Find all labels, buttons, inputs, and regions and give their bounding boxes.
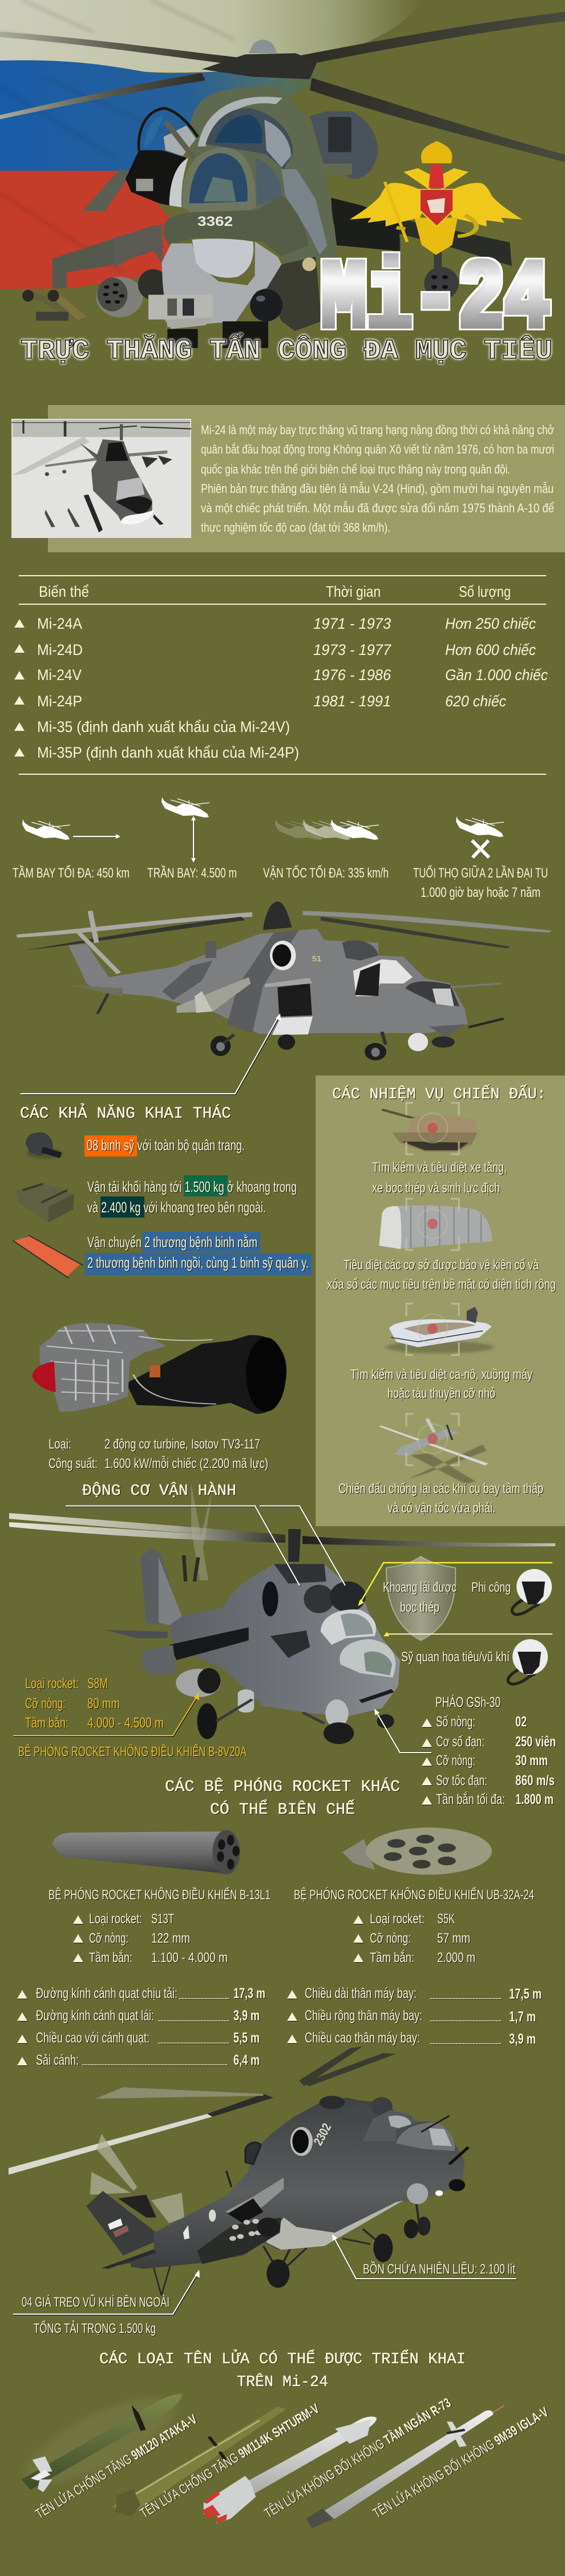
item: casualties: Vận chuyển 2 thương bệnh binh nằm — [87, 1234, 257, 1251]
specs: rotor and size (left) — [17, 1985, 265, 2068]
missile: 9M39 Igla-V — [306, 2405, 505, 2529]
heading: missiles — [99, 2348, 466, 2391]
icon: drone — [378, 1414, 489, 1483]
icon: helmet with night vision — [26, 1133, 63, 1159]
right wing root — [331, 198, 399, 251]
upper canopy — [198, 97, 293, 169]
gun specs: GSh-30: Cơ số đạn: — [436, 1734, 485, 1750]
gun specs: GSh-30: 02 — [515, 1714, 527, 1730]
specs: B-13L1: BỆ PHÓNG ROCKET KHÔNG ĐIỀU KHIỂN B-13L1 — [49, 1887, 271, 1903]
gun specs: GSh-30 — [422, 1694, 556, 1807]
table rows: 620 chiếc — [445, 693, 506, 710]
engine specs: Công suất: — [49, 1456, 98, 1471]
flag: Russian tricolour — [0, 0, 422, 289]
callout: fuel tank — [332, 2234, 516, 2279]
specs: B-13L1: Loại rocket: — [89, 1911, 142, 1927]
specs: rotor and size (left): 3,9 m — [233, 2008, 260, 2024]
lower nose grey — [162, 241, 284, 327]
table: variants — [14, 575, 548, 775]
helicopter front view — [114, 84, 399, 348]
fuselage — [104, 1529, 400, 1744]
engine intake — [310, 111, 378, 179]
specs: rotor and size (left): 17,3 m — [233, 1985, 265, 2001]
table rows: Mi-24P — [37, 693, 82, 710]
callout: engine arrows — [66, 1506, 345, 1586]
specs: UB-32A-24: Tầm bắn: — [370, 1950, 414, 1966]
tail fin — [86, 2191, 156, 2255]
stabilizer — [102, 2250, 156, 2269]
nose gear — [167, 321, 268, 348]
heading: transport capabilities: CÁC KHẢ NĂNG KHAI THÁC — [20, 1103, 231, 1123]
callout: external hardpoints: TỔNG TẢI TRỌNG 1.500 kg — [34, 2320, 156, 2336]
stub wing — [225, 2178, 284, 2223]
table rows: Mi-35 (định danh xuất khẩu của Mi-24V) — [37, 718, 290, 735]
rocket pod specs: B-8V20A: BỆ PHÓNG ROCKET KHÔNG ĐIỀU KHIỂN B-8V20A — [18, 1744, 247, 1760]
specs: B-13L1: S13T — [151, 1911, 174, 1927]
helicopter side view: 51 — [312, 954, 322, 963]
rotor hub — [202, 39, 317, 79]
engine specs: 2 động cơ turbine, Isotov TV3-117 — [104, 1437, 260, 1452]
icon: tank — [382, 1103, 478, 1154]
gunner canopies — [363, 2110, 455, 2151]
panel: introduction — [11, 405, 565, 552]
main rotor blades — [0, 12, 565, 162]
callout: weapons officer — [384, 1632, 552, 1684]
specs: rotor and size (left): Sải cánh: — [36, 2052, 79, 2068]
rocket pod specs: B-8V20A: S8M — [87, 1676, 108, 1692]
attack helicopter banking view — [9, 2047, 469, 2295]
specs: B-13L1: 1.100 - 4.000 m — [151, 1950, 228, 1966]
callout: pilot: Phi công — [471, 1580, 511, 1595]
table rows: 1973 - 1977 — [313, 641, 392, 658]
rotor blades — [9, 2047, 396, 2175]
stat: ceiling: TRẦN BAY: 4.500 m — [147, 865, 237, 881]
callout: B-8V20A pod — [13, 1692, 199, 1736]
table rows — [14, 615, 548, 761]
specs: rotor and size (left): 6,4 m — [233, 2052, 260, 2068]
missile label: R-73: TÊN LỬA KHÔNG ĐỐI KHÔNG TẦM NGẮN R-73 — [261, 2394, 454, 2521]
side number: 2302 — [310, 2121, 334, 2148]
side marking — [183, 2210, 216, 2239]
rocket pod illustration: UB-32A-24 — [342, 1827, 492, 1875]
heading: other rocket pods — [165, 1777, 400, 1819]
item: soldiers — [84, 1135, 245, 1156]
specs: rotor and size (left): Chiều cao với cánh quạt: — [36, 2030, 150, 2046]
specs: B-13L1 — [49, 1887, 271, 1966]
heading: other rocket pods: CÁC BỆ PHÓNG ROCKET KHÁC — [165, 1777, 400, 1796]
landing light — [302, 257, 316, 271]
under-nose — [164, 318, 213, 329]
table header: Thời gian — [326, 583, 381, 600]
specs: fuselage size (right): 3,9 m — [509, 2031, 536, 2047]
rocket pod specs: B-8V20A: Tầm bắn: — [25, 1714, 68, 1731]
engine specs: Loại: — [49, 1437, 71, 1452]
rocket pod specs: B-8V20A: 4.000 - 4.500 m — [87, 1715, 164, 1731]
right lower body — [267, 257, 321, 331]
item: cargo: Vận tải khối hàng tới 1.500 kg ở khoang trong — [87, 1178, 297, 1195]
specs: UB-32A-24: S5K — [437, 1911, 455, 1927]
heading: missiles: TRÊN Mi-24 — [237, 2373, 328, 2391]
engine illustration — [33, 1323, 286, 1414]
rocket pods — [197, 2218, 281, 2264]
missile label: Ataka-V: TÊN LỬA CHỐNG TĂNG 9M120 ATAKA-V — [33, 2411, 200, 2522]
specs: rotor and size (left): Đường kính cánh quạt lái: — [36, 2008, 154, 2024]
specs: UB-32A-24: 2.000 m — [437, 1950, 475, 1966]
icon: cargo crate — [15, 1183, 74, 1222]
panel: combat missions — [316, 1075, 565, 1526]
section: transport capabilities — [13, 1103, 312, 1278]
belly highlight — [266, 2201, 403, 2250]
specs: fuselage size (right): Chiều cao thân máy bay: — [305, 2030, 420, 2046]
table header — [39, 583, 511, 600]
specs: rotor and size (left): Đường kính cánh quạt chịu tải: — [36, 1985, 177, 2001]
icon: pilot helmet — [512, 1569, 552, 1615]
gun box — [148, 295, 213, 320]
intro text — [201, 423, 554, 535]
heading: engines: ĐỘNG CƠ VẬN HÀNH — [82, 1481, 236, 1500]
specs: B-13L1: Cỡ nòng: — [89, 1931, 128, 1946]
specs: rotor and size (left): 5,5 m — [233, 2030, 260, 2046]
table rows: 1976 - 1986 — [313, 666, 392, 684]
stat: overhaul life — [413, 816, 548, 900]
gun specs: GSh-30: Sơ tốc đạn: — [436, 1773, 487, 1789]
item: soldiers: 08 binh sỹ với toàn bộ quân trang. — [87, 1137, 245, 1154]
exhaust intake — [290, 2127, 313, 2156]
stat: max speed: VẬN TỐC TỐI ĐA: 335 km/h — [263, 865, 389, 881]
callout: armoured cockpit — [358, 1563, 552, 1615]
missile: 9M120 Ataka-V — [6, 2383, 195, 2497]
chin sensor — [192, 238, 253, 278]
gun specs: GSh-30: 30 mm — [515, 1753, 548, 1769]
subtitle: TRỰC THĂNG TẤN CÔNG ĐA MỤC TIÊU — [21, 334, 552, 367]
specs: UB-32A-24: Cỡ nòng: — [370, 1931, 411, 1946]
nose number: 3362 — [197, 214, 233, 229]
tail flag — [108, 2218, 129, 2238]
arrowhead: cabin door — [276, 1013, 281, 1021]
icon: hardened shelter — [379, 1199, 492, 1250]
specs: B-13L1: Tầm bắn: — [89, 1950, 132, 1966]
fuselage — [103, 2098, 465, 2269]
table rows: 1981 - 1991 — [313, 693, 391, 710]
callout: external hardpoints — [13, 2270, 200, 2336]
text: low-flying aircraft: và có vận tốc vừa phải. — [388, 1501, 495, 1516]
shield: armoured cockpit — [386, 1556, 455, 1640]
missile label: Shturm-V: TÊN LỬA CHỐNG TĂNG 9M114K SHTURM-V — [137, 2400, 322, 2521]
stub wings and rear parts — [53, 168, 512, 288]
table rows: Mi-24D — [37, 641, 83, 658]
table rows: Mi-35P (định danh xuất khẩu của Mi-24P) — [37, 744, 299, 761]
fuselage — [190, 84, 337, 264]
table header: Biến thể — [39, 583, 89, 600]
callout: external hardpoints: 04 GIÁ TREO VŨ KHÍ BÊN NGOÀI — [22, 2294, 170, 2310]
text: boats: hoặc tàu thuyền cỡ nhỏ — [388, 1386, 495, 1401]
gun specs: GSh-30: Cỡ nòng: — [436, 1753, 475, 1769]
rocket pod illustration: B-13L1 — [53, 1830, 240, 1874]
rocket pod specs: B-8V20A: 80 mm — [87, 1696, 120, 1712]
stat: ceiling — [147, 797, 237, 881]
text: shelters — [327, 1257, 556, 1292]
text: tanks: Tìm kiếm và tiêu diệt xe tăng, — [372, 1160, 507, 1175]
stat: max speed — [263, 819, 389, 881]
glass behind door — [164, 126, 196, 156]
grey fuselage band — [281, 169, 327, 255]
rocket pod specs: B-8V20A: Cỡ nòng: — [25, 1696, 66, 1712]
landing gear — [263, 2202, 430, 2288]
tail rotor — [90, 2134, 184, 2223]
text: boats — [350, 1367, 532, 1401]
specs: B-13L1: 122 mm — [151, 1931, 190, 1946]
icon: officer helmet — [508, 1639, 548, 1684]
specs: fuselage size (right) — [287, 1985, 542, 2047]
table rows: Gần 1.000 chiếc — [445, 666, 548, 684]
text: tanks: xe bọc thép và sinh lực địch — [372, 1180, 500, 1196]
intro text: thực nghiệm tốc độ cao (đạt tới 368 km/h). — [201, 520, 390, 535]
heading: missiles: CÁC LOẠI TÊN LỬA CÓ THỂ ĐƯỢC TRIỂN KHAI — [99, 2348, 466, 2368]
icon: stretcher — [13, 1235, 83, 1278]
rocket pod specs: B-8V20A: Loại rocket: — [25, 1676, 79, 1692]
table rows: Mi-24V — [37, 666, 82, 684]
lower canopy — [170, 147, 282, 212]
table rows: Hơn 250 chiếc — [445, 615, 536, 632]
callout: weapons officer: Sỹ quan hoa tiêu/vũ khí — [401, 1649, 510, 1665]
specs: UB-32A-24: Loại rocket: — [370, 1911, 425, 1927]
stat: range: TẦM BAY TỐI ĐA: 450 km — [13, 865, 130, 881]
table rows: 1971 - 1973 — [313, 615, 391, 632]
missile launcher — [22, 289, 87, 321]
missile: 9M114K Shturm-V — [112, 2407, 286, 2517]
nose — [164, 196, 308, 257]
gun specs: GSh-30: PHÁO GSh-30 — [435, 1694, 501, 1710]
specs: fuselage size (right): Chiều dài thân máy bay: — [305, 1985, 417, 2001]
rotor blades — [9, 1483, 555, 1580]
callout: pilot — [471, 1569, 552, 1615]
left wing root — [114, 224, 163, 268]
specs: fuselage size (right): 17,5 m — [509, 1986, 542, 2002]
table header: Số lượng — [459, 583, 511, 600]
callout: armoured cockpit: bọc thép — [400, 1600, 439, 1615]
rocket pods — [96, 267, 459, 317]
table rows: Mi-24A — [37, 615, 82, 632]
helicopter side view — [16, 901, 551, 1061]
specs: UB-32A-24 — [294, 1887, 534, 1966]
specs: fuselage size (right): 1,7 m — [509, 2009, 536, 2025]
gun specs: GSh-30: Tần bắn tối đa: — [436, 1791, 505, 1807]
text: low-flying aircraft — [338, 1481, 543, 1516]
skids — [154, 2265, 170, 2295]
item: casualties: 2 thương bệnh binh ngồi, cùng 1 binh sỹ quân y. — [87, 1254, 309, 1271]
rocket pod specs: B-8V20A — [18, 1676, 247, 1760]
callout: armoured cockpit: Khoang lái được — [383, 1580, 457, 1595]
hero backdrop — [0, 0, 565, 321]
specs: fuselage size (right): Chiều rộng thân máy bay: — [305, 2008, 422, 2024]
photo: early Mi-24 — [11, 419, 191, 538]
callout: cabin door — [21, 1016, 279, 1094]
item: cargo — [87, 1175, 297, 1218]
ball turret — [250, 289, 282, 321]
heading: other rocket pods: CÓ THỂ BIÊN CHẾ — [210, 1799, 355, 1819]
item: cargo: và 2.400 kg với khoang treo bên ngoài. — [87, 1199, 266, 1216]
specs: UB-32A-24: 57 mm — [437, 1931, 470, 1946]
heading: combat missions: CÁC NHIỆM VỤ CHIẾN ĐẤU: — [332, 1084, 546, 1103]
engine intakes — [320, 2096, 393, 2126]
stat: range — [13, 819, 130, 881]
callout: GSh-30 gun — [374, 1709, 431, 1753]
table rows: Hơn 600 chiếc — [445, 641, 536, 658]
open door — [126, 108, 198, 205]
icon: boat — [386, 1304, 494, 1355]
engine specs: 1.600 kW/mỗi chiếc (2.200 mã lực) — [104, 1456, 268, 1471]
text: tanks — [372, 1160, 507, 1196]
item: casualties — [85, 1232, 312, 1275]
missile: R-73 — [202, 2417, 377, 2524]
gun specs: GSh-30: Số nòng: — [436, 1714, 475, 1730]
helicopter three-quarter view — [9, 1483, 555, 1744]
emblem: double-headed eagle — [349, 141, 523, 255]
engine specs — [49, 1437, 268, 1471]
guns and sensors — [227, 2116, 469, 2204]
